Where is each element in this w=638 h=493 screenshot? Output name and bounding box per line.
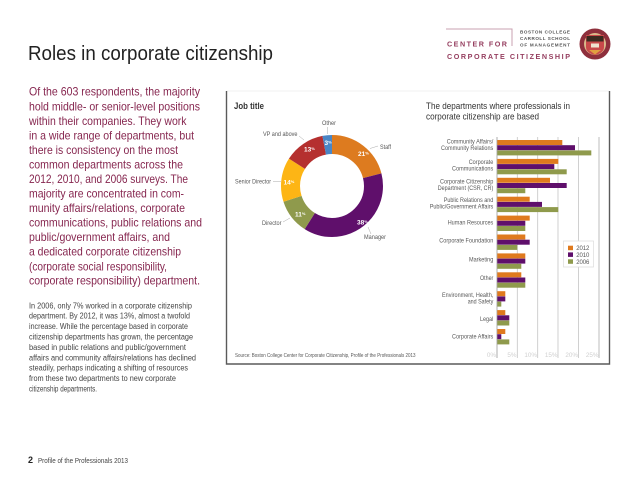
icon: Boston College seal (580, 28, 610, 60)
bar category labels: Other (480, 275, 493, 282)
bar category labels: Public Relations and (444, 197, 494, 204)
text block: main intro: Of the 603 respondents, the majority (29, 85, 200, 99)
bar category labels: Community Affairs/ (447, 138, 494, 145)
text block: secondary paragraph: department. By 2012, it was 13%, almost a twofold (29, 312, 190, 321)
text block: secondary paragraph: affairs and community affairs/relations has declined (29, 353, 196, 362)
text block: main intro: majority are concentrated in com- (29, 186, 184, 200)
bar category labels: Corporate (469, 159, 494, 166)
heading: departments (426, 101, 570, 122)
bar axis labels: 10% (524, 352, 537, 359)
donut category labels and leaders: Senior Director (235, 178, 271, 186)
bar axis labels: 15% (545, 352, 558, 359)
text block: main intro: in a wide range of departments, but (29, 128, 195, 142)
text block: secondary paragraph: In 2006, only 7% worked in a corporate citizenship (29, 301, 193, 310)
text block: main intro: (corporate social responsibility, (29, 259, 167, 273)
text block: secondary paragraph: increase. While the percentage based in corporate (29, 322, 188, 331)
logo: Center for Corporate Citizenship: CENTER FOR (447, 40, 508, 48)
bars: public relations (497, 197, 558, 212)
donut value labels: 38 (357, 220, 364, 226)
bar chart: departments (430, 137, 599, 359)
footer: page number and publication name: 2 (28, 455, 33, 465)
text block: main intro: munity affairs/relations, corporate (29, 201, 185, 215)
donut value labels: % (311, 146, 315, 151)
bar category labels: Corporate Affairs (452, 333, 493, 340)
donut value labels: % (302, 211, 306, 216)
bars: corporate communications (497, 159, 567, 174)
logo: Center for Corporate Citizenship: CORPORATE CITIZENSHIP (447, 52, 570, 61)
logo: Center for Corporate Citizenship: CARROLL SCHOOL (520, 36, 570, 41)
text block: secondary paragraph (29, 301, 196, 394)
bar category labels: Corporate Citizenship (440, 178, 494, 185)
donut value labels: 13 (304, 146, 311, 154)
heading: departments: The departments where professionals in (426, 101, 570, 111)
bar axis labels: 0% (487, 352, 496, 359)
bar category labels: Marketing (469, 257, 494, 264)
bar category labels: Corporate Foundation (439, 238, 494, 245)
legend (564, 241, 594, 267)
donut value labels: % (291, 179, 295, 184)
text block: main intro: corporate responsibility) department. (29, 274, 200, 288)
text block: secondary paragraph: citizenship departments. (29, 384, 97, 394)
bar category labels: Public/Government Affairs (430, 204, 493, 211)
bars: corporate foundation (497, 234, 530, 250)
bar axis labels (487, 352, 599, 359)
footer: page number and publication name: Profile of the Professionals 2013 (38, 458, 128, 465)
text block: main intro: there is consistency on the most (29, 143, 179, 157)
text block: secondary paragraph: steadily, perhaps indicating a shifting of resources (29, 364, 188, 373)
donut category labels and leaders: VP and above (263, 131, 298, 138)
bars: legal (497, 310, 509, 326)
text block: main intro: communications, public relations and (29, 216, 202, 230)
bars: corporate citizenship department (497, 178, 567, 193)
text block: main intro: within their companies. They work (28, 114, 187, 128)
bars: human resources (497, 216, 530, 231)
donut category labels and leaders: Director (262, 220, 282, 227)
bar category labels: Department (CSR, CR) (438, 185, 493, 192)
bars: corporate affairs (497, 329, 509, 344)
bar axis labels: 20% (565, 352, 578, 359)
legend: 2006 (576, 260, 590, 266)
heading: job title: Job title (234, 101, 264, 111)
logo: Center for Corporate Citizenship: OF MANAGEMENT (520, 42, 570, 48)
donut value labels: 14 (284, 180, 291, 186)
bars: environment, health and safety (497, 291, 505, 307)
bars: other (497, 272, 525, 288)
bars: marketing (497, 253, 525, 269)
bar category labels: Community Relations (441, 145, 493, 152)
donut value labels: 3 (324, 140, 328, 147)
footer: page number and publication name (28, 455, 128, 465)
heading: departments: corporate citizenship are based (426, 112, 539, 122)
text block: main intro: public/government affairs, and (29, 230, 170, 244)
donut category labels and leaders: Manager (364, 234, 386, 241)
bar axis labels: 25% (586, 352, 599, 359)
text block: main intro (28, 85, 202, 288)
donut category labels and leaders: Staff (380, 144, 391, 151)
legend: 2012 (576, 246, 590, 252)
donut value labels: 21 (358, 151, 365, 158)
logo: Center for Corporate Citizenship (446, 29, 570, 61)
legend: 2010 (576, 253, 590, 259)
source note: Source: Boston College Center for Corporate Citizenship, Profile of the Professionals 2013 (235, 353, 416, 359)
text block: main intro: a dedicated corporate citizenship (29, 245, 181, 259)
donut category labels and leaders (235, 120, 391, 241)
donut value labels: % (328, 140, 332, 144)
text block: secondary paragraph: citizenship departments has grown, the percentage (29, 332, 193, 342)
donut value labels: 11 (295, 212, 302, 218)
logo: Center for Corporate Citizenship: BOSTON COLLEGE (520, 30, 570, 34)
donut category labels and leaders: Other (322, 120, 336, 127)
bar category labels: Human Resources (448, 219, 493, 226)
text block: main intro: hold middle- or senior-level positions (29, 99, 200, 113)
donut chart: job title (235, 101, 599, 359)
donut value labels: % (365, 150, 369, 156)
panel: charts (226, 91, 610, 364)
text block: main intro: 2012, 2010, and 2006 surveys. The (29, 172, 188, 186)
title: Roles in corporate citizenship (28, 43, 273, 65)
bar category labels (430, 138, 494, 340)
text block: main intro: common departments across the (29, 157, 183, 171)
donut value labels: % (364, 219, 368, 224)
bar axis labels: 5% (507, 352, 517, 359)
text block: secondary paragraph: from these two departments to new corporate (29, 374, 176, 383)
text block: secondary paragraph: based in public relations and public/government (29, 343, 187, 352)
bar category labels: Communications (452, 166, 493, 173)
bar category labels: Environment, Health, (442, 292, 494, 299)
bar category labels: Legal (480, 316, 493, 323)
bar category labels: and Safety (468, 299, 494, 306)
donut value labels (284, 140, 369, 226)
bars: community affairs (497, 140, 591, 155)
